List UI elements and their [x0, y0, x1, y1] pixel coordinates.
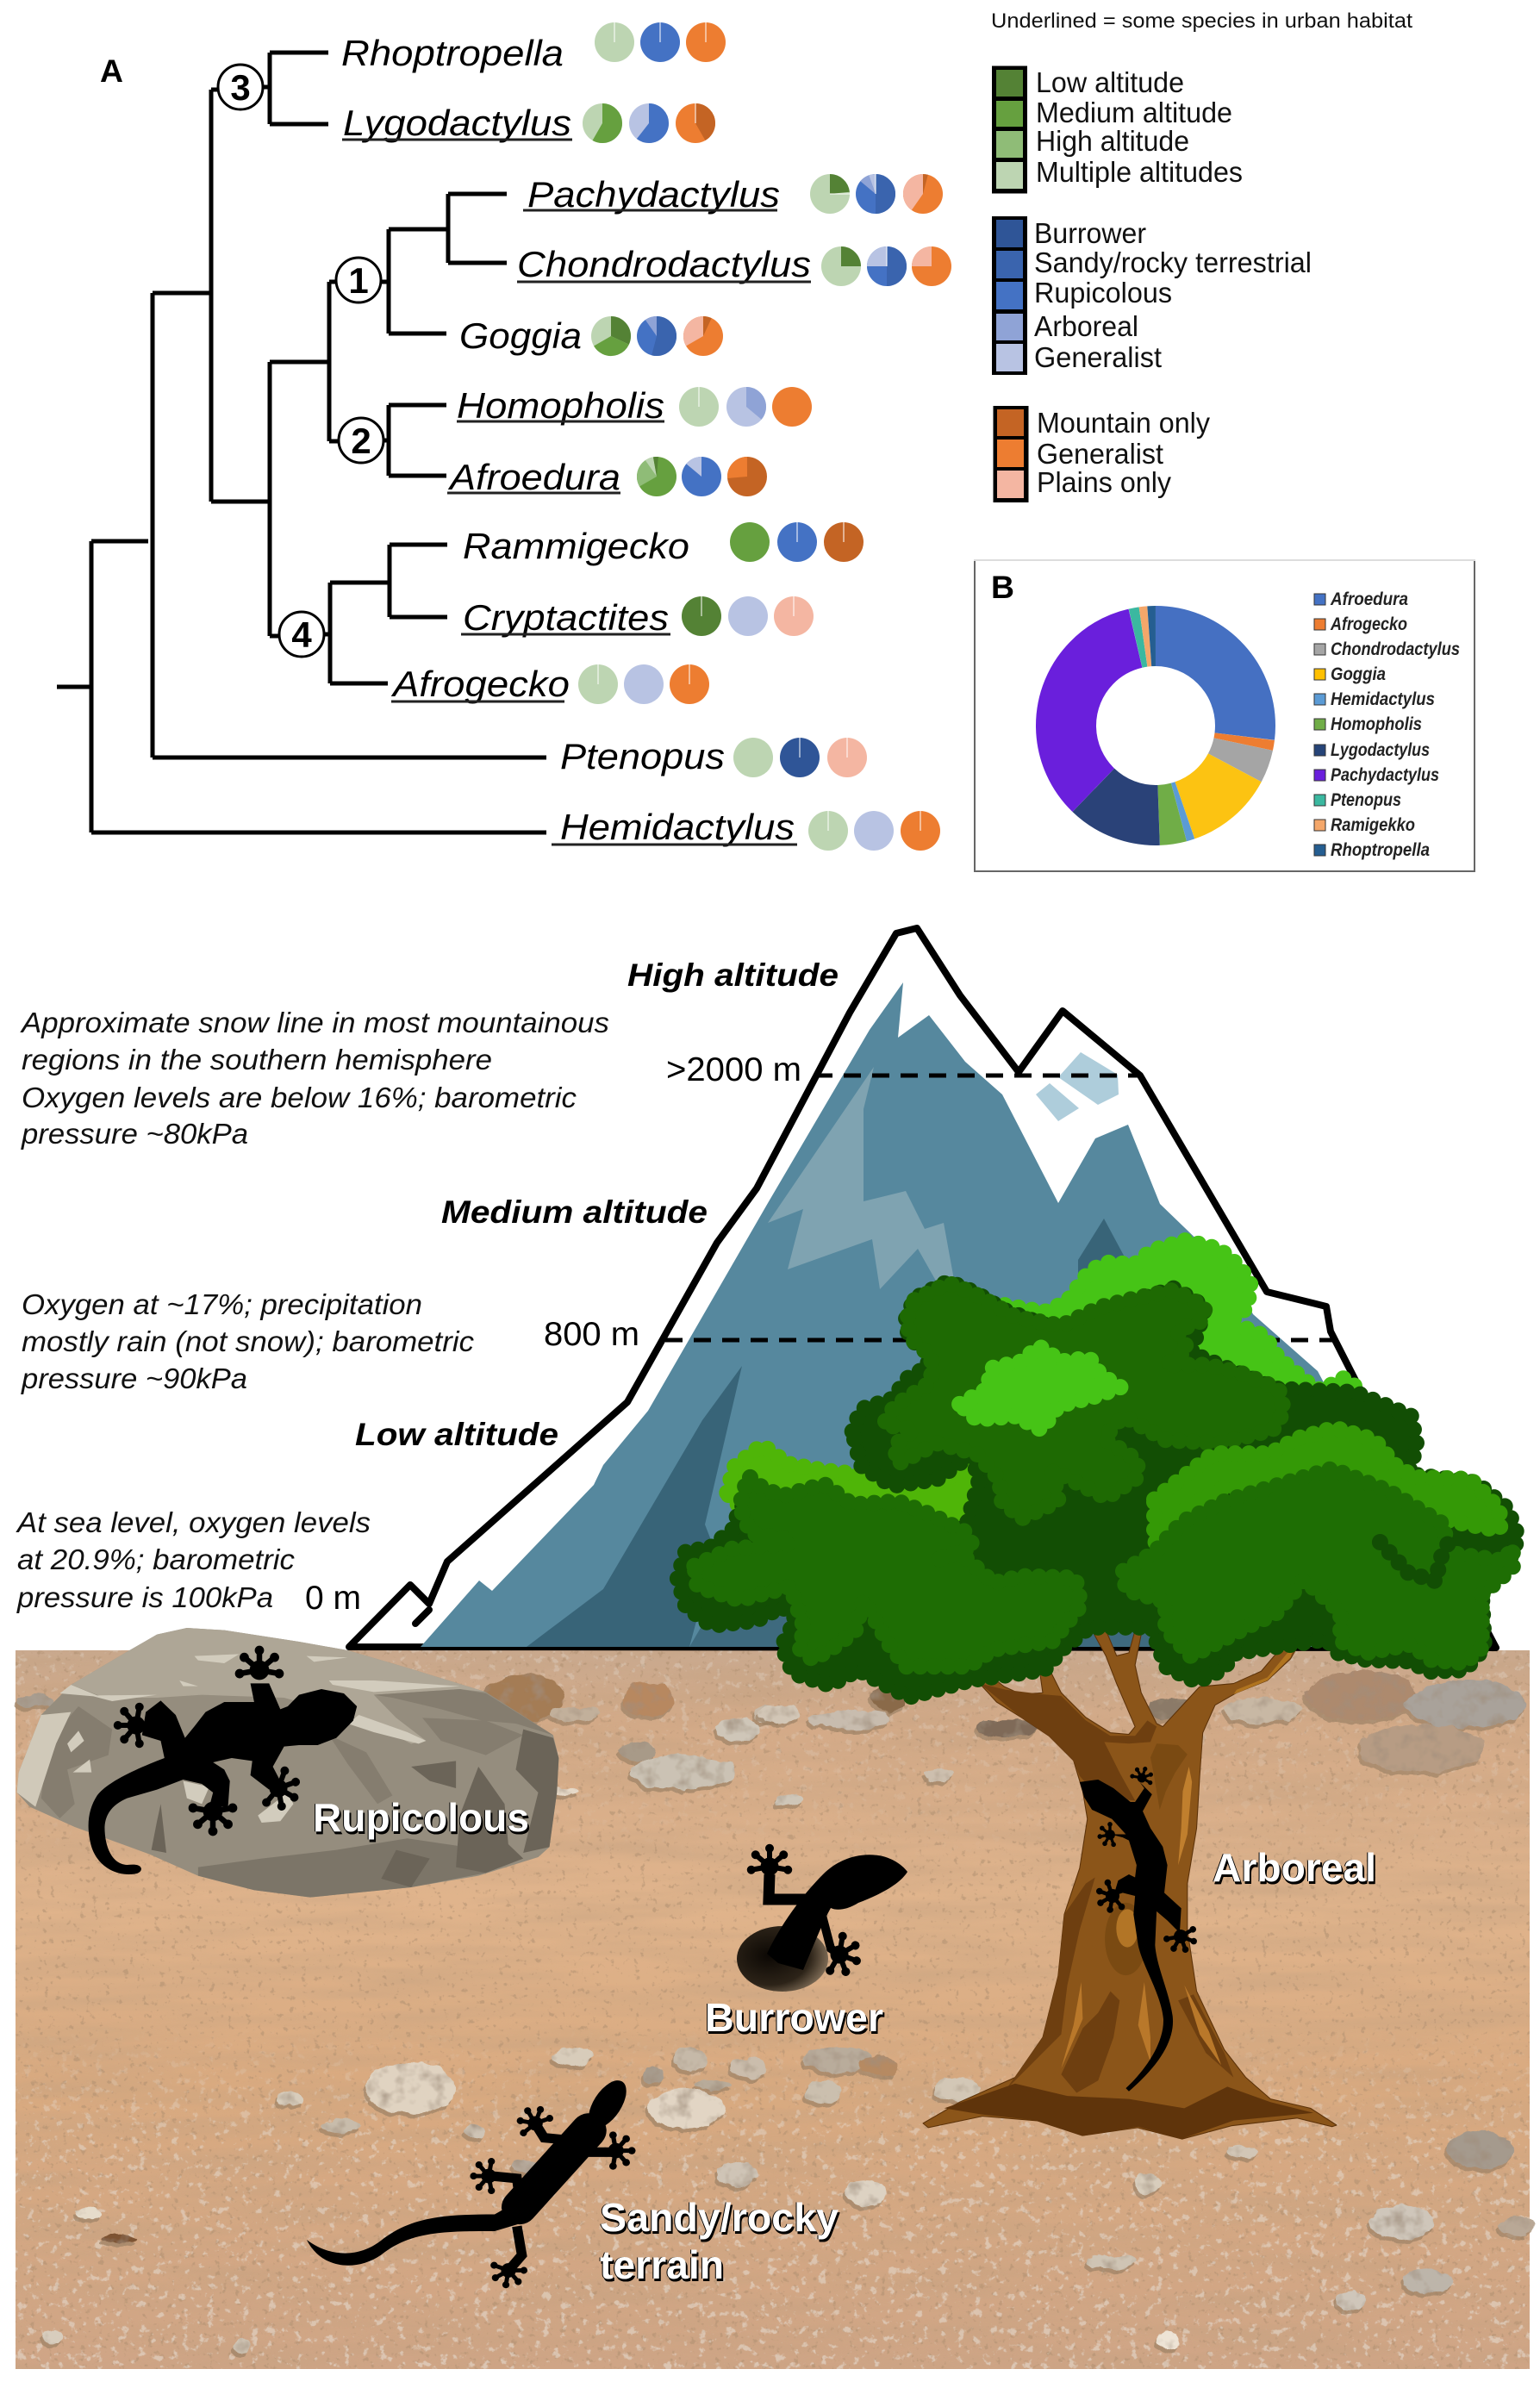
taxon: Ptenopus: Ptenopus — [560, 736, 725, 776]
altitude note: low: at 20.9%; barometric — [17, 1543, 296, 1575]
altitude note: medium — [21, 1288, 475, 1394]
elevation label: 800 m: 800 m — [544, 1316, 639, 1353]
stones on the right half — [758, 1671, 1534, 2348]
node 1 — [336, 258, 381, 302]
legend: habitat: Generalist — [1034, 341, 1162, 373]
panel letter B: B — [991, 570, 1014, 605]
mountain illustration — [349, 928, 1496, 1648]
stones on the left half — [17, 1674, 782, 2354]
mountain blue rock body — [421, 982, 1465, 1647]
mountain dark shadow lower — [527, 1366, 742, 1647]
altitude note: high — [20, 1007, 609, 1150]
taxon: Lygodactylus: Lygodactylus — [343, 103, 571, 143]
taxon: Chondrodactylus — [517, 244, 951, 286]
gecko on trunk — [1080, 1763, 1203, 2092]
altitude note: high: pressure ~80kPa — [21, 1118, 248, 1150]
taxon: Goggia: Goggia — [459, 315, 582, 356]
ice patches — [1036, 1052, 1119, 1121]
donut legend — [1314, 589, 1460, 860]
label: Burrower: Burrower — [705, 1995, 883, 2040]
legend: habitat: Burrower — [1034, 217, 1146, 249]
legend: elevation range — [993, 406, 1210, 502]
altitude note: medium: pressure ~90kPa — [21, 1362, 247, 1394]
elevation label: 0 m: 0 m — [305, 1580, 361, 1617]
legend: altitude: Multiple altitudes — [1036, 156, 1243, 188]
donut legend: Lygodactylus — [1331, 740, 1430, 760]
node 4 — [279, 612, 324, 657]
right medium green foliage — [1154, 1428, 1501, 1542]
taxon: Hemidactylus — [552, 807, 940, 851]
hook detail on ridge — [415, 1610, 429, 1624]
mountain snow-covered outline — [349, 928, 1496, 1648]
donut legend: Afrogecko — [1330, 614, 1407, 634]
legend: altitude: High altitude — [1036, 125, 1189, 157]
legend: elevation range: Mountain only — [1037, 407, 1210, 439]
altitude note: medium: mostly rain (not snow); barometric — [22, 1325, 475, 1357]
dark notch in right foliage — [1380, 1534, 1448, 1581]
darkest foliage mass — [677, 1281, 1518, 1697]
node 4: 4 — [291, 614, 312, 655]
taxon: Afroedura: Afroedura — [447, 457, 620, 497]
legend: habitat: Sandy/rocky terrestrial — [1034, 246, 1312, 278]
donut legend: Ramigekko — [1331, 815, 1415, 835]
panel letter A: A — [100, 53, 123, 89]
node 1: 1 — [348, 260, 369, 301]
bright foliage behind upper right — [1005, 1241, 1355, 1411]
note: underlined meaning: Underlined = some species in urban habitat — [991, 9, 1412, 33]
legend: altitude: Medium altitude — [1036, 97, 1232, 128]
altitude note: low: pressure is 100kPa — [16, 1581, 273, 1613]
label: Sandy/rocky terrain — [600, 2195, 839, 2287]
taxon: Hemidactylus: Hemidactylus — [560, 807, 795, 847]
node 2: 2 — [351, 421, 371, 461]
bright foliage behind lower left — [727, 1445, 982, 1531]
rock illustration — [17, 1628, 558, 1898]
taxon: Chondrodactylus: Chondrodactylus — [517, 244, 811, 284]
elevation label: 2000 m: >2000 m — [666, 1051, 801, 1088]
taxon: Lygodactylus — [342, 103, 715, 143]
phylogenetic tree branches — [57, 53, 546, 832]
tree trunk — [923, 1619, 1337, 2139]
heading: Medium altitude: Medium altitude — [441, 1194, 708, 1230]
taxon: Ptenopus — [560, 736, 867, 777]
mountain dark shadow upper — [1078, 1219, 1129, 1280]
dashed line: 2000 m — [815, 1074, 1141, 1077]
heading: High altitude: High altitude — [627, 957, 839, 993]
taxon: Homopholis: Homopholis — [457, 385, 664, 426]
taxon: Afroedura — [447, 457, 767, 497]
panel A: phylogeny with trait pies — [57, 22, 951, 851]
taxon: Rhoptropella — [341, 22, 726, 73]
donut legend: Ptenopus — [1331, 790, 1401, 810]
node 3: 3 — [230, 67, 251, 108]
gecko on sandy terrain — [307, 2074, 636, 2291]
donut legend: Afroedura — [1330, 589, 1408, 609]
taxon: Cryptactites — [461, 596, 814, 638]
ground: desert sand backdrop — [16, 1650, 1534, 2369]
mountain dark shadow base — [689, 1603, 1293, 1647]
legend: altitude — [992, 65, 1243, 193]
label: Sandy/rocky terrain: Sandy/rocky — [600, 2195, 839, 2240]
altitude note: high: Approximate snow line in most mountainous — [20, 1007, 609, 1038]
gecko on rock — [89, 1646, 357, 1874]
taxon: Goggia — [459, 315, 723, 356]
legend: elevation range: Plains only — [1037, 466, 1171, 498]
dashed line: 800 m — [665, 1337, 1334, 1343]
altitude note: low: At sea level, oxygen levels — [16, 1506, 371, 1538]
taxon: Rammigecko — [463, 522, 864, 566]
label: Rupicolous: Rupicolous — [313, 1795, 529, 1840]
altitude note: high: regions in the southern hemisphere — [22, 1044, 492, 1076]
legend: habitat: Arboreal — [1034, 310, 1138, 342]
node 2 — [339, 418, 383, 463]
donut legend: Rhoptropella — [1331, 840, 1430, 860]
taxon: Afrogecko: Afrogecko — [390, 664, 570, 704]
donut legend: Goggia — [1331, 664, 1386, 684]
lower left mid-green foliage — [695, 1475, 1081, 1667]
legend: altitude: Low altitude — [1036, 66, 1184, 98]
mountain pale rock highlight — [768, 1067, 954, 1289]
panel B: species share donut — [974, 560, 1475, 871]
altitude note: high: Oxygen levels are below 16%; barometric — [22, 1082, 577, 1113]
taxon: Pachydactylus: Pachydactylus — [527, 174, 780, 215]
taxon: Homopholis — [457, 385, 812, 427]
donut legend: Hemidactylus — [1331, 689, 1435, 709]
label: Arboreal: Arboreal — [1213, 1845, 1376, 1890]
legend: habitat: Rupicolous — [1034, 277, 1172, 309]
gecko emerging from burrow — [747, 1844, 907, 1984]
taxon: Rhoptropella: Rhoptropella — [341, 33, 564, 73]
upper mid-green foliage — [883, 1283, 1284, 1518]
donut legend: Chondrodactylus — [1331, 639, 1460, 659]
heading: Low altitude: Low altitude — [355, 1417, 558, 1452]
tree canopy — [677, 1241, 1518, 1697]
label: Sandy/rocky terrain: terrain — [600, 2242, 724, 2287]
taxon: Cryptactites: Cryptactites — [463, 597, 669, 638]
donut chart — [1029, 599, 1282, 852]
donut legend: Homopholis — [1331, 714, 1422, 734]
node 3 — [218, 65, 263, 109]
taxon: Rammigecko: Rammigecko — [463, 526, 689, 566]
altitude note: medium: Oxygen at ~17%; precipitation — [22, 1288, 422, 1320]
altitude note: low — [16, 1506, 371, 1613]
legend: elevation range: Generalist — [1037, 438, 1163, 470]
taxon: Afrogecko — [390, 664, 709, 704]
right lower foliage — [1123, 1468, 1512, 1663]
bright central highlight — [960, 1346, 1120, 1430]
donut legend: Pachydactylus — [1331, 765, 1439, 785]
taxon: Pachydactylus — [523, 174, 943, 215]
burrow hole — [737, 1926, 828, 1992]
legend: habitat — [992, 216, 1312, 375]
